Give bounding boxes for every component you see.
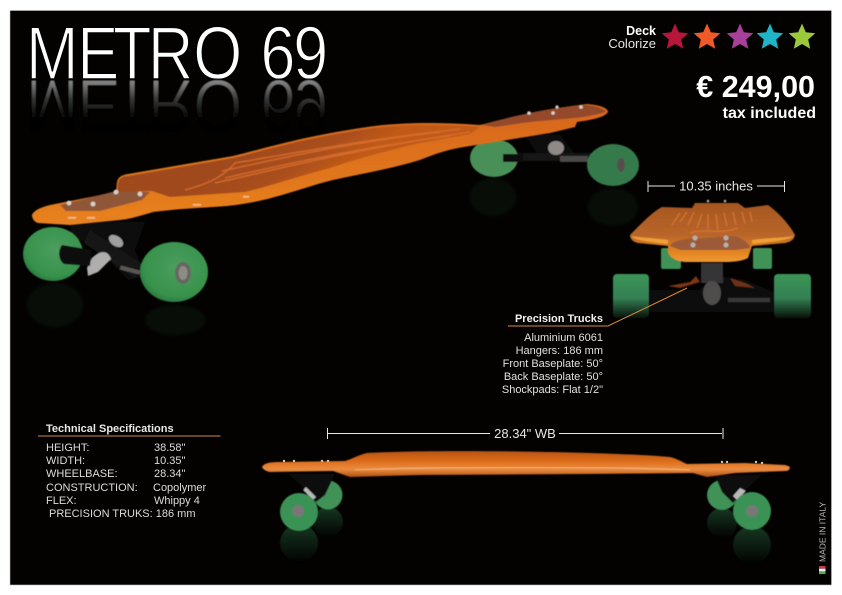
dimension: wheelbase [328, 426, 723, 441]
specs rows: PRECISION TRUKS: 186 mm [49, 508, 196, 520]
made in italy label: MADE IN ITALY [818, 502, 828, 562]
callout text: Precision Trucks [515, 313, 603, 325]
panel: technical specifications [38, 423, 220, 520]
callout: precision trucks [502, 288, 687, 396]
mounting plates [60, 191, 150, 211]
side wheel reflections [280, 507, 771, 564]
specs rows: Copolymer [153, 482, 207, 494]
side wheels and trucks [280, 474, 771, 531]
price [696, 70, 816, 122]
bolts [67, 105, 583, 206]
deck top surface [117, 125, 480, 197]
star swatches [662, 24, 815, 49]
dimension: deck width [648, 178, 784, 194]
specs rows: WIDTH: [46, 455, 85, 467]
price: € 249,00 [696, 70, 815, 104]
front wheels [613, 274, 649, 318]
rear wheels [661, 248, 681, 269]
front deck graphic [672, 212, 752, 233]
deck graphic [185, 129, 470, 190]
legend: deck colorize [608, 24, 815, 51]
near truck [23, 222, 208, 302]
dimension: deck width: 10.35 inches [679, 178, 753, 194]
leader line [508, 288, 687, 326]
specs rows: HEIGHT: [46, 442, 89, 454]
specs rule [38, 435, 220, 437]
callout text [502, 313, 603, 396]
specs rows [46, 442, 207, 520]
title reflection: METRO 69 [26, 64, 328, 148]
specs rows: Whippy 4 [154, 495, 200, 507]
callout text: Front Baseplate: 50° [503, 358, 603, 370]
specs rows: WHEELBASE: [46, 468, 118, 480]
legend label [608, 24, 656, 51]
specs rows: FLEX: [46, 495, 77, 507]
front view skateboard [613, 200, 811, 318]
specs rows: 10.35" [154, 455, 186, 467]
callout text: Aluminium 6061 [524, 332, 603, 344]
far truck and wheels [470, 135, 639, 186]
title: METRO 69 [26, 11, 328, 95]
front deck [630, 203, 795, 262]
side bolts [283, 460, 763, 464]
specs rows: 38.58" [154, 442, 186, 454]
side deck highlight [355, 467, 690, 470]
specs rows: 28.34" [154, 468, 186, 480]
front plate [670, 236, 750, 250]
deck [32, 104, 608, 225]
legend label: Deck [626, 24, 656, 38]
callout text: Hangers: 186 mm [516, 345, 603, 357]
specs rows: CONSTRUCTION: [46, 482, 138, 494]
specs heading: Technical Specifications [46, 423, 174, 435]
icon: italian flag [819, 566, 826, 574]
side view skateboard [262, 451, 790, 564]
side deck [262, 451, 790, 477]
front truck [650, 275, 773, 312]
main skateboard photo [23, 104, 639, 335]
callout text: Back Baseplate: 50° [504, 371, 603, 383]
front deck lower rim [631, 236, 794, 244]
price: tax included [723, 105, 816, 122]
front bolts [690, 200, 728, 248]
callout text: Shockpads: Flat 1/2" [502, 384, 603, 396]
wheel reflections [27, 178, 638, 335]
edge highlights [68, 196, 249, 219]
deck outline [32, 104, 608, 225]
dimension: wheelbase: 28.34" WB [494, 426, 556, 441]
legend label: Colorize [608, 36, 656, 51]
